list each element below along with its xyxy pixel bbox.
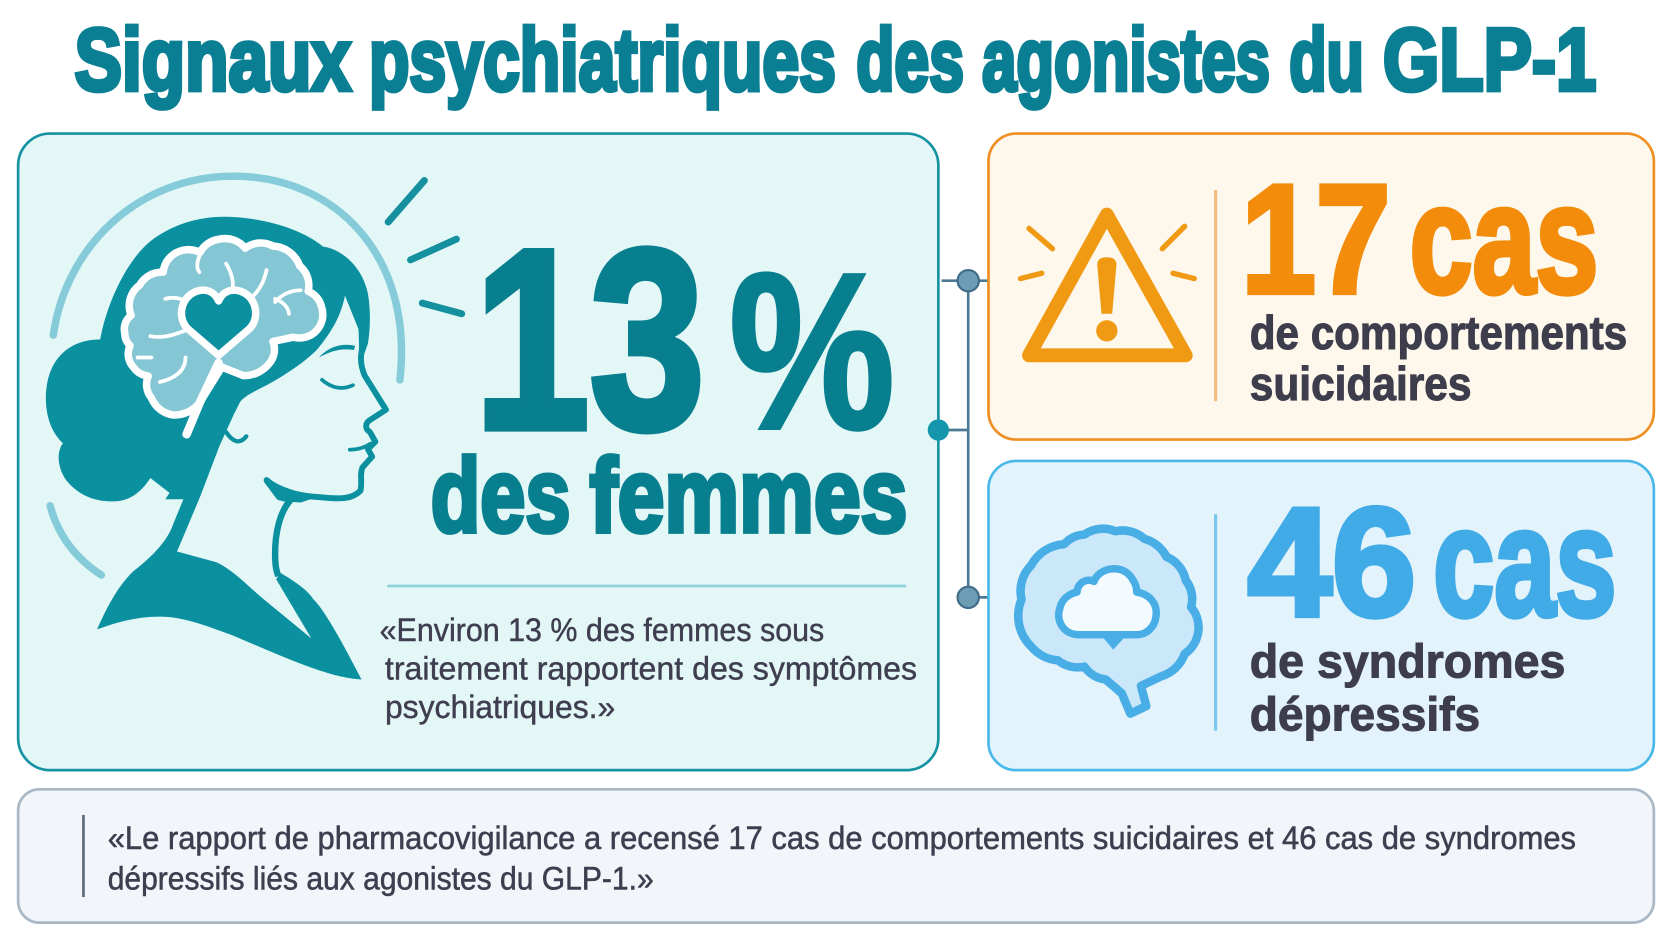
icon: warning triangle [1020,215,1194,355]
quote text: psychiatriques.» [385,689,615,725]
icon: woman profile with brain and heart [46,176,462,680]
warning rays [1020,226,1194,279]
big stat: 13 % [475,197,895,483]
signal rays [388,180,462,314]
quote text [380,612,917,725]
panel background [18,789,1654,923]
title: du [1289,10,1364,109]
big stat: 13 %: 13 [475,197,705,483]
face profile line [267,341,386,498]
brow [319,345,355,357]
quote bar [82,815,85,897]
label: de comportements suicidaires: suicidaires [1250,358,1472,410]
title: agonistes [982,10,1270,109]
big stat: 46 cas: 46 [1248,476,1416,649]
closed eye [322,380,353,388]
connector dot: orange panel [958,270,979,291]
heart [181,290,256,355]
panel background [988,134,1654,440]
brain stem [187,363,219,434]
hair and shoulders [46,217,370,679]
label: de syndromes dépressifs: de syndromes [1250,635,1565,687]
brain folds [138,256,301,382]
panel: 17 cas [988,134,1654,440]
label: de syndromes dépressifs: dépressifs [1250,689,1480,741]
panel: bottom quote [18,789,1654,923]
stat label: des femmes: des [431,437,570,554]
jaw and neck line [267,480,291,576]
title: des [856,10,964,109]
stat label: des femmes: femmes [590,437,907,554]
stat label: des femmes [431,437,907,554]
icon: brain with cloud [1018,529,1199,714]
quote text [108,820,1576,897]
label: de comportements suicidaires: de comportements [1250,307,1627,359]
ear [226,432,246,441]
divider [1214,514,1217,731]
quote text: traitement rapportent des symptômes [385,651,917,687]
big stat: 17 cas: 17 [1241,152,1390,325]
big stat: 17 cas [1241,152,1598,325]
title: GLP-1 [1383,10,1596,109]
mouth [350,444,370,450]
brain [124,238,323,434]
panel background [18,134,938,770]
label: de syndromes dépressifs [1250,635,1565,741]
connector lines [928,270,988,608]
label: de comportements suicidaires [1250,307,1627,410]
connector dot: blue panel [958,587,979,608]
quote text: dépressifs liés aux agonistes du GLP-1.» [108,861,654,897]
quote text: «Le rapport de pharmacovigilance a recensé 17 cas de comportements suicidaires et 46 cas de syndromes [108,820,1576,856]
big stat: 46 cas [1248,476,1617,649]
quote text: «Environ 13 % des femmes sous [380,612,824,648]
title: Signaux [75,10,351,109]
divider [1214,190,1217,401]
big stat: 17 cas: cas [1410,152,1598,325]
panel: 13 % des femmes [18,134,938,770]
title [75,10,1596,109]
panel: 46 cas [988,461,1654,770]
big stat: 13 %: % [729,228,895,476]
halo arcs [50,176,401,575]
panel background [988,461,1654,770]
title: psychiatriques [369,10,836,109]
cloud [1059,569,1156,635]
divider [387,585,906,587]
connector dot: main panel [928,419,949,441]
